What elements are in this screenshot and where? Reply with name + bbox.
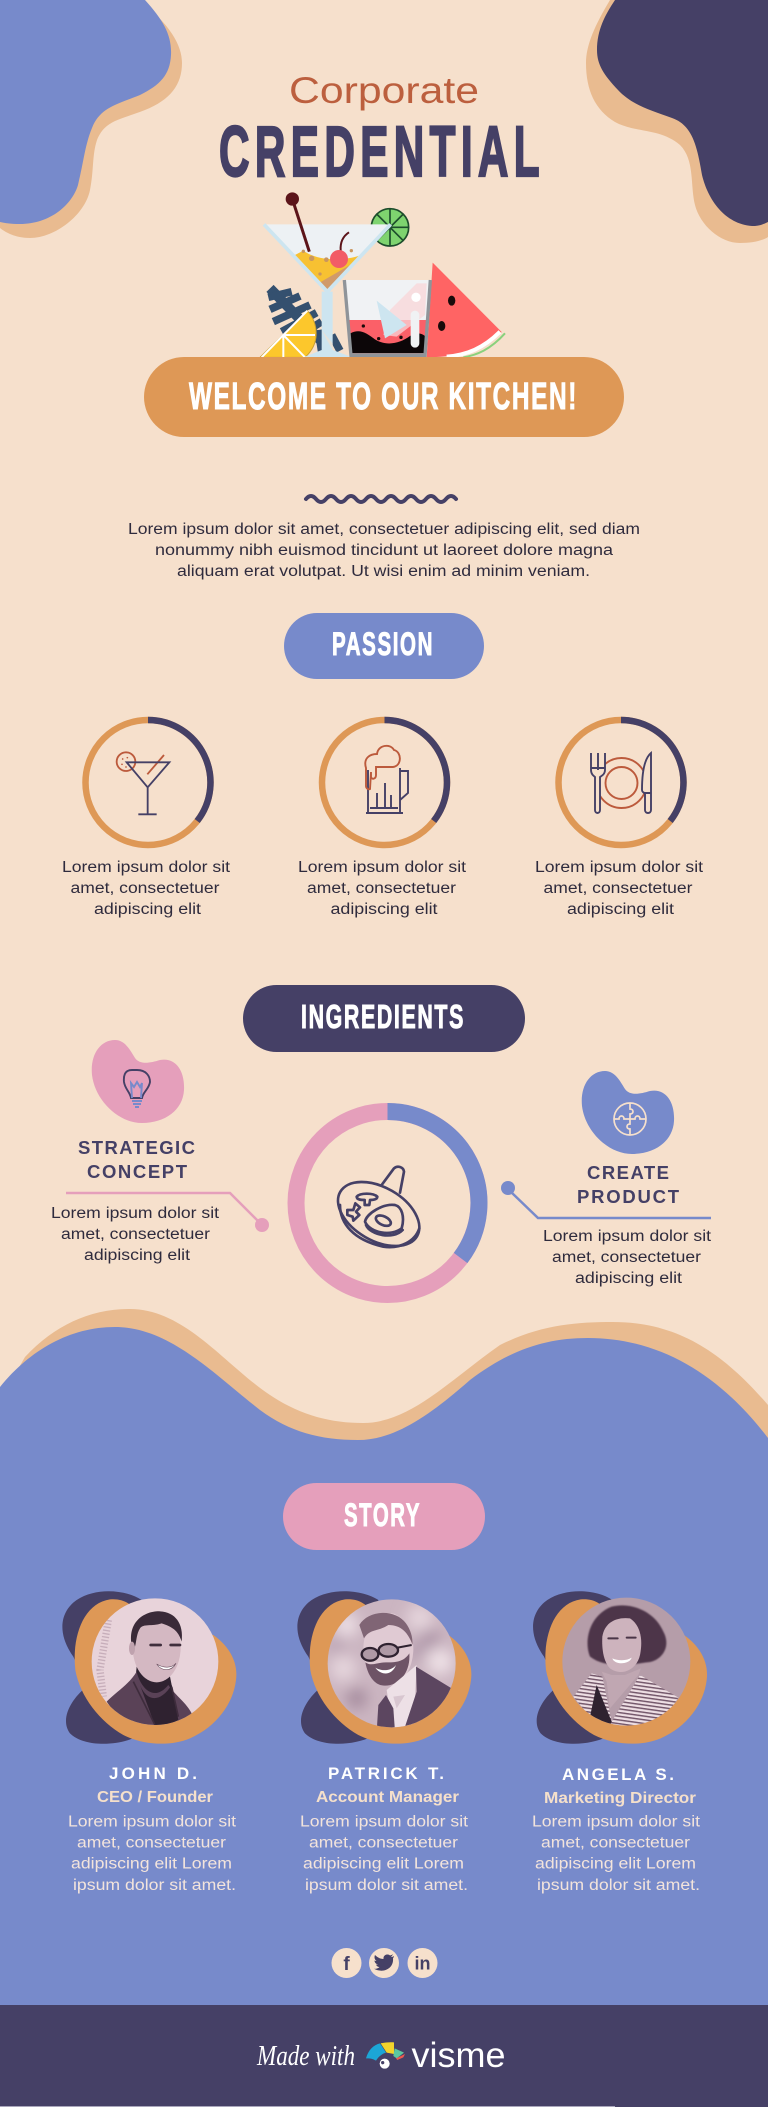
visme wordmark: visme xyxy=(412,2036,506,2075)
panel: john d xyxy=(62,1591,237,1894)
name and role: Account Manager xyxy=(316,1789,459,1806)
illustration: cocktails and watermelon xyxy=(260,192,505,357)
panel: passion item 1 xyxy=(62,720,231,918)
bio: Lorem ipsum dolor sit xyxy=(532,1814,701,1830)
heading: ingredients xyxy=(243,985,525,1052)
bio: amet, consectetuer xyxy=(309,1834,458,1852)
text: amet, consectetuer xyxy=(552,1249,701,1266)
caption xyxy=(535,859,704,918)
bio xyxy=(532,1814,701,1894)
icon: lime slice xyxy=(371,209,409,246)
name and role: ANGELA S. xyxy=(562,1765,674,1784)
text xyxy=(51,1205,220,1264)
donut chart xyxy=(296,1112,479,1294)
icon: facebook: f xyxy=(343,1954,350,1975)
caption: adipiscing elit xyxy=(567,901,675,918)
icon: martini xyxy=(117,752,169,814)
wave background xyxy=(0,1309,768,2005)
footer xyxy=(0,2005,768,2107)
caption: adipiscing elit xyxy=(330,901,438,918)
text: Lorem ipsum dolor sit xyxy=(543,1228,712,1245)
caption: adipiscing elit xyxy=(94,901,202,918)
caption: Lorem ipsum dolor sit xyxy=(298,859,467,876)
name and role xyxy=(316,1764,459,1806)
caption xyxy=(62,859,231,918)
bio xyxy=(300,1814,469,1894)
name and role xyxy=(544,1765,696,1807)
portrait: patrick xyxy=(297,1591,471,1744)
text: adipiscing elit xyxy=(575,1270,683,1287)
icon: beer mug xyxy=(365,746,408,813)
heading: passion: PASSION xyxy=(332,626,434,662)
icon: pan xyxy=(327,1167,430,1259)
icon: tumbler glass xyxy=(344,280,432,357)
heading: CREATE xyxy=(587,1162,669,1183)
made with text: Made with xyxy=(256,2041,355,2072)
text xyxy=(543,1228,712,1287)
panel: strategic concept xyxy=(51,1040,269,1264)
ring chart xyxy=(558,720,684,845)
caption: Lorem ipsum dolor sit xyxy=(535,859,704,876)
heading: story xyxy=(283,1483,485,1550)
caption: amet, consectetuer xyxy=(544,880,692,897)
heading xyxy=(78,1137,195,1182)
title: Corporate xyxy=(289,70,479,111)
portrait: angela xyxy=(533,1591,707,1744)
heading: ingredients: INGREDIENTS xyxy=(301,998,465,1035)
top-left corner blob xyxy=(0,0,182,238)
connector line xyxy=(501,1181,711,1218)
intro paragraph: Lorem ipsum dolor sit amet, consectetuer adipiscing elit, sed diam xyxy=(128,521,640,538)
bio xyxy=(68,1814,237,1894)
icon: plate and cutlery xyxy=(591,753,651,813)
text: amet, consectetuer xyxy=(61,1226,210,1243)
caption: amet, consectetuer xyxy=(307,880,456,897)
top-right corner blob xyxy=(586,0,768,243)
text: Lorem ipsum dolor sit xyxy=(51,1205,220,1222)
icon: visme logo xyxy=(366,2042,405,2069)
intro paragraph xyxy=(128,521,640,580)
ring chart xyxy=(86,720,210,845)
panel: patrick t xyxy=(297,1591,471,1894)
social icons xyxy=(332,1948,438,1978)
caption xyxy=(298,859,467,918)
title xyxy=(219,70,545,192)
intro paragraph: nonummy nibh euismod tincidunt ut laoreet dolore magna xyxy=(155,542,613,559)
name and role xyxy=(97,1764,213,1806)
bio: adipiscing elit Lorem xyxy=(303,1856,464,1872)
welcome banner xyxy=(144,357,624,437)
icon: lemon xyxy=(260,311,316,357)
bio: adipiscing elit Lorem xyxy=(71,1856,232,1872)
connector line xyxy=(66,1193,269,1232)
caption: Lorem ipsum dolor sit xyxy=(62,859,231,876)
intro paragraph: aliquam erat volutpat. Ut wisi enim ad minim veniam. xyxy=(177,563,590,580)
bio: Lorem ipsum dolor sit xyxy=(300,1814,469,1830)
heading: passion xyxy=(284,613,484,679)
title: CREDENTIAL xyxy=(219,113,545,192)
icon: puzzle blob xyxy=(582,1071,674,1154)
bio: amet, consectetuer xyxy=(77,1834,226,1852)
panel: passion item 2 xyxy=(298,720,467,918)
icon: watermelon slice xyxy=(427,263,505,357)
panel: create product xyxy=(501,1071,712,1287)
icon: martini glass xyxy=(264,192,391,357)
name and role: Marketing Director xyxy=(544,1790,696,1807)
bio: Lorem ipsum dolor sit xyxy=(68,1814,237,1830)
heading: STRATEGIC xyxy=(78,1137,195,1158)
heading xyxy=(577,1162,680,1207)
icon: twitter xyxy=(369,1948,399,1978)
icon: linkedin: in xyxy=(414,1954,430,1974)
heading: PRODUCT xyxy=(577,1186,680,1207)
bio: amet, consectetuer xyxy=(541,1834,690,1852)
ring chart xyxy=(322,720,447,845)
bio: adipiscing elit Lorem xyxy=(535,1856,696,1872)
caption: amet, consectetuer xyxy=(70,880,220,897)
heading: CONCEPT xyxy=(87,1161,188,1182)
bio: ipsum dolor sit amet. xyxy=(73,1877,236,1894)
name and role: CEO / Founder xyxy=(97,1789,213,1806)
name and role: PATRICK T. xyxy=(328,1764,444,1783)
portrait: john xyxy=(62,1591,236,1744)
heading: story: STORY xyxy=(344,1497,421,1533)
panel: passion item 3 xyxy=(535,720,704,918)
icon: light bulb blob xyxy=(92,1040,184,1123)
bio: ipsum dolor sit amet. xyxy=(537,1877,700,1894)
name and role: JOHN D. xyxy=(109,1764,197,1783)
panel: angela s xyxy=(532,1591,707,1894)
icon: leaf xyxy=(268,288,340,352)
text: adipiscing elit xyxy=(84,1247,191,1264)
bio: ipsum dolor sit amet. xyxy=(305,1877,468,1894)
